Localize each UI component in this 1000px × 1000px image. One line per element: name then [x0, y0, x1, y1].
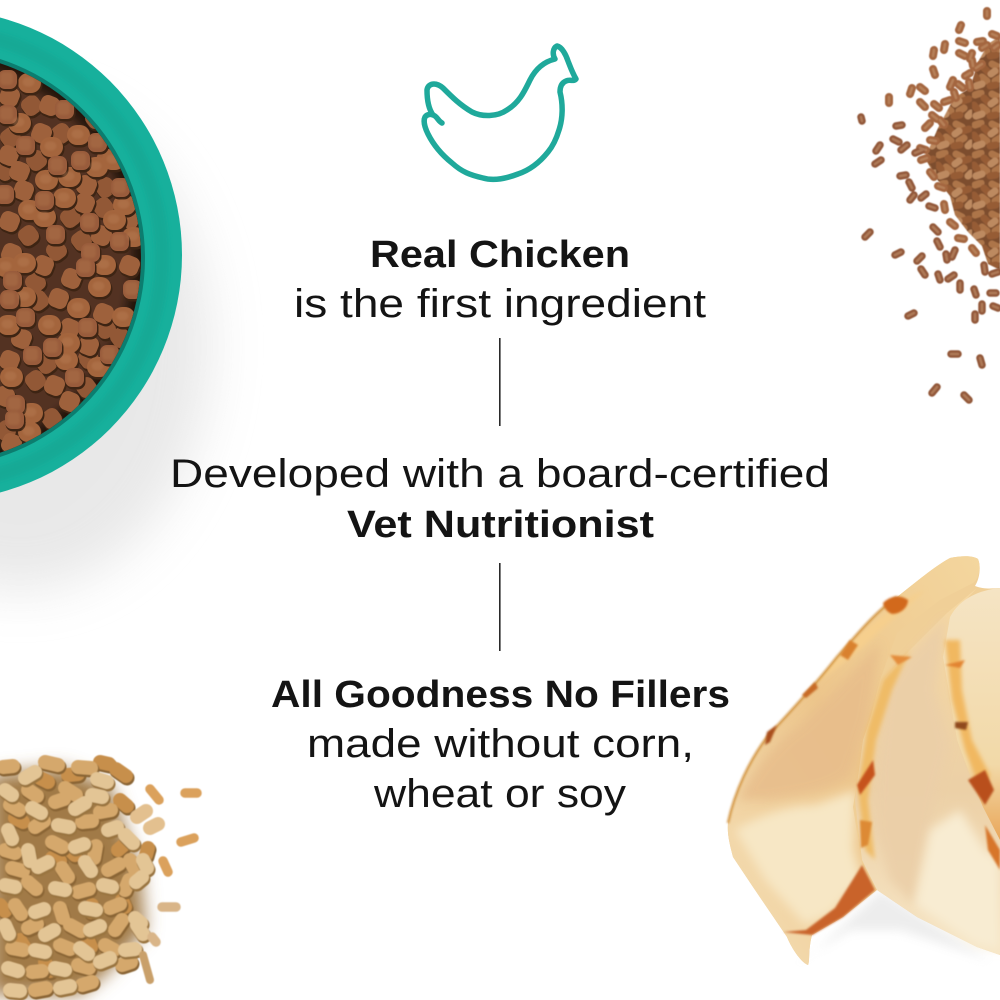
image: wheat grains: [0, 762, 197, 995]
text: vet nutritionist: [170, 452, 830, 546]
text: real chicken: [294, 234, 706, 326]
left slice: [720, 550, 990, 970]
under slice char: [783, 865, 875, 935]
image: flax seeds: [861, 11, 1000, 400]
text: vet nutritionist: Vet Nutritionist: [347, 504, 654, 546]
text: all goodness no fillers: [271, 674, 730, 816]
text: all goodness no fillers: made without corn,: [307, 722, 694, 766]
divider line 2: [499, 563, 501, 651]
text: all goodness no fillers: All Goodness No Fillers: [271, 674, 730, 716]
image: teal bowl of kibble: [0, 9, 210, 590]
middle slice: [855, 588, 1000, 955]
text: vet nutritionist: Developed with a board-certified: [170, 452, 830, 496]
icon: chicken outline: [424, 46, 576, 179]
kibble pile: [0, 62, 136, 454]
text: real chicken: Real Chicken: [370, 234, 630, 276]
divider line 1: [499, 338, 501, 426]
chicken silhouette base: [728, 556, 1000, 965]
loose grains: [137, 811, 158, 828]
char marks: [728, 597, 897, 823]
text: all goodness no fillers: wheat or soy: [373, 772, 626, 816]
text: real chicken: is the first ingredient: [294, 282, 706, 326]
image: grilled chicken slices: [720, 550, 1000, 970]
right slice: [943, 588, 1000, 840]
